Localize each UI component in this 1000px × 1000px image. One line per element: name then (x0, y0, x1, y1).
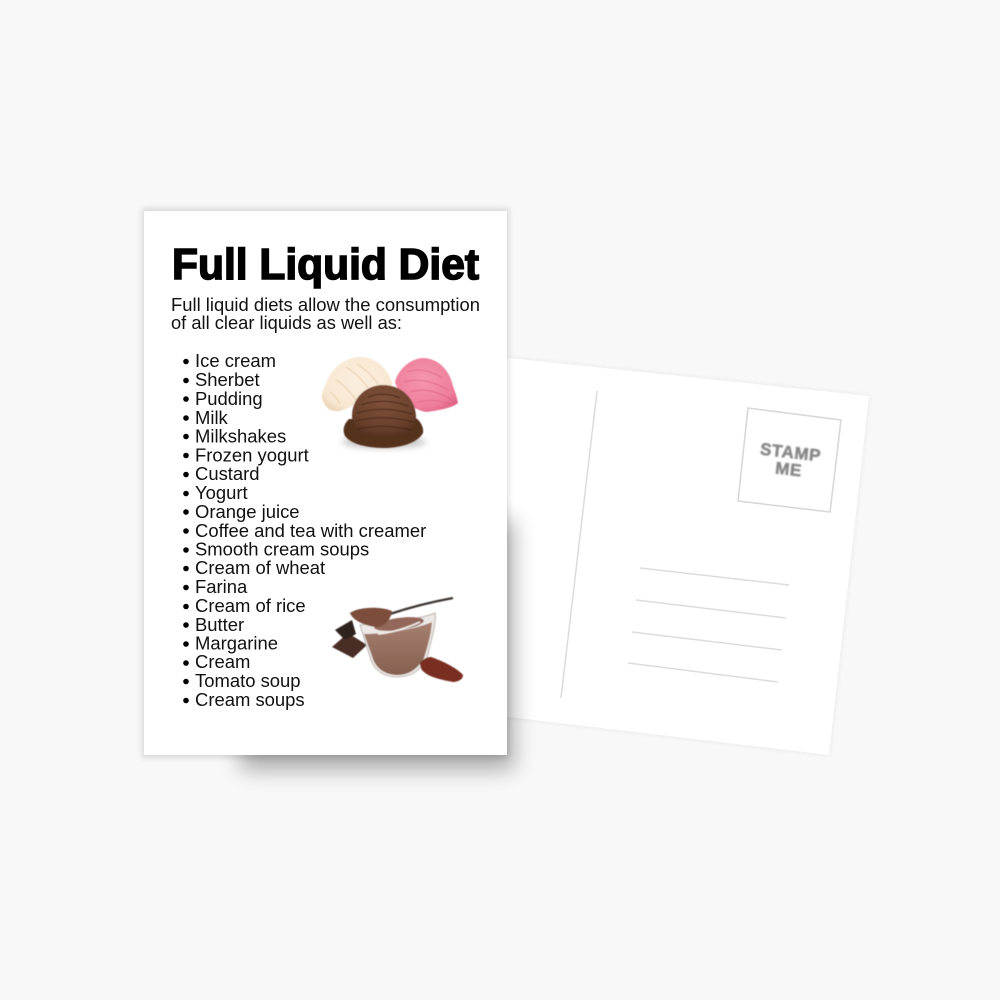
bulleted list: Sherbet (195, 369, 260, 390)
bulleted list: Custard (195, 463, 260, 484)
postcard back (500, 357, 869, 755)
bulleted list: Yogurt (195, 482, 248, 503)
chocolate scoop (344, 418, 423, 448)
address lines (628, 568, 789, 682)
bulleted list: Farina (195, 576, 248, 597)
title: Full Liquid Diet (172, 240, 479, 289)
bulleted list: Coffee and tea with creamer (195, 520, 426, 541)
icon: ice cream scoops (322, 357, 458, 448)
postcard front shadow (142, 208, 514, 770)
bulleted list: Cream of rice (195, 595, 306, 616)
bulleted list (183, 350, 426, 710)
bulleted list: Pudding (195, 388, 263, 409)
bulleted list: Tomato soup (195, 670, 301, 691)
bulleted list: Cream (195, 651, 250, 672)
bulleted list: Cream soups (195, 689, 305, 710)
postcard front (144, 211, 507, 755)
bulleted list: Margarine (195, 632, 278, 654)
intro text (171, 294, 480, 333)
bulleted list: Butter (195, 614, 244, 635)
strawberry scoop (395, 358, 458, 412)
bulleted list: Milk (195, 407, 229, 428)
bulleted list: Cream of wheat (195, 557, 325, 578)
divider line (561, 391, 597, 698)
stamp box (738, 408, 841, 512)
bulleted list: Frozen yogurt (195, 444, 309, 466)
intro text: Full liquid diets allow the consumption (171, 294, 480, 315)
bulleted list: Smooth cream soups (195, 538, 369, 560)
spoon (390, 598, 453, 614)
stamp box: ME (774, 459, 803, 480)
bulleted list: Orange juice (195, 501, 300, 522)
glass with pudding (360, 613, 435, 677)
bulleted list: Milkshakes (195, 426, 286, 446)
bulleted list: Ice cream (195, 350, 276, 371)
vanilla scoop (322, 357, 392, 411)
intro text: of all clear liquids as well as: (171, 312, 402, 333)
cocoa powder (420, 657, 463, 682)
stamp box: STAMP (759, 440, 822, 465)
chocolate pieces (332, 620, 367, 658)
icon: chocolate pudding glass (332, 598, 463, 682)
